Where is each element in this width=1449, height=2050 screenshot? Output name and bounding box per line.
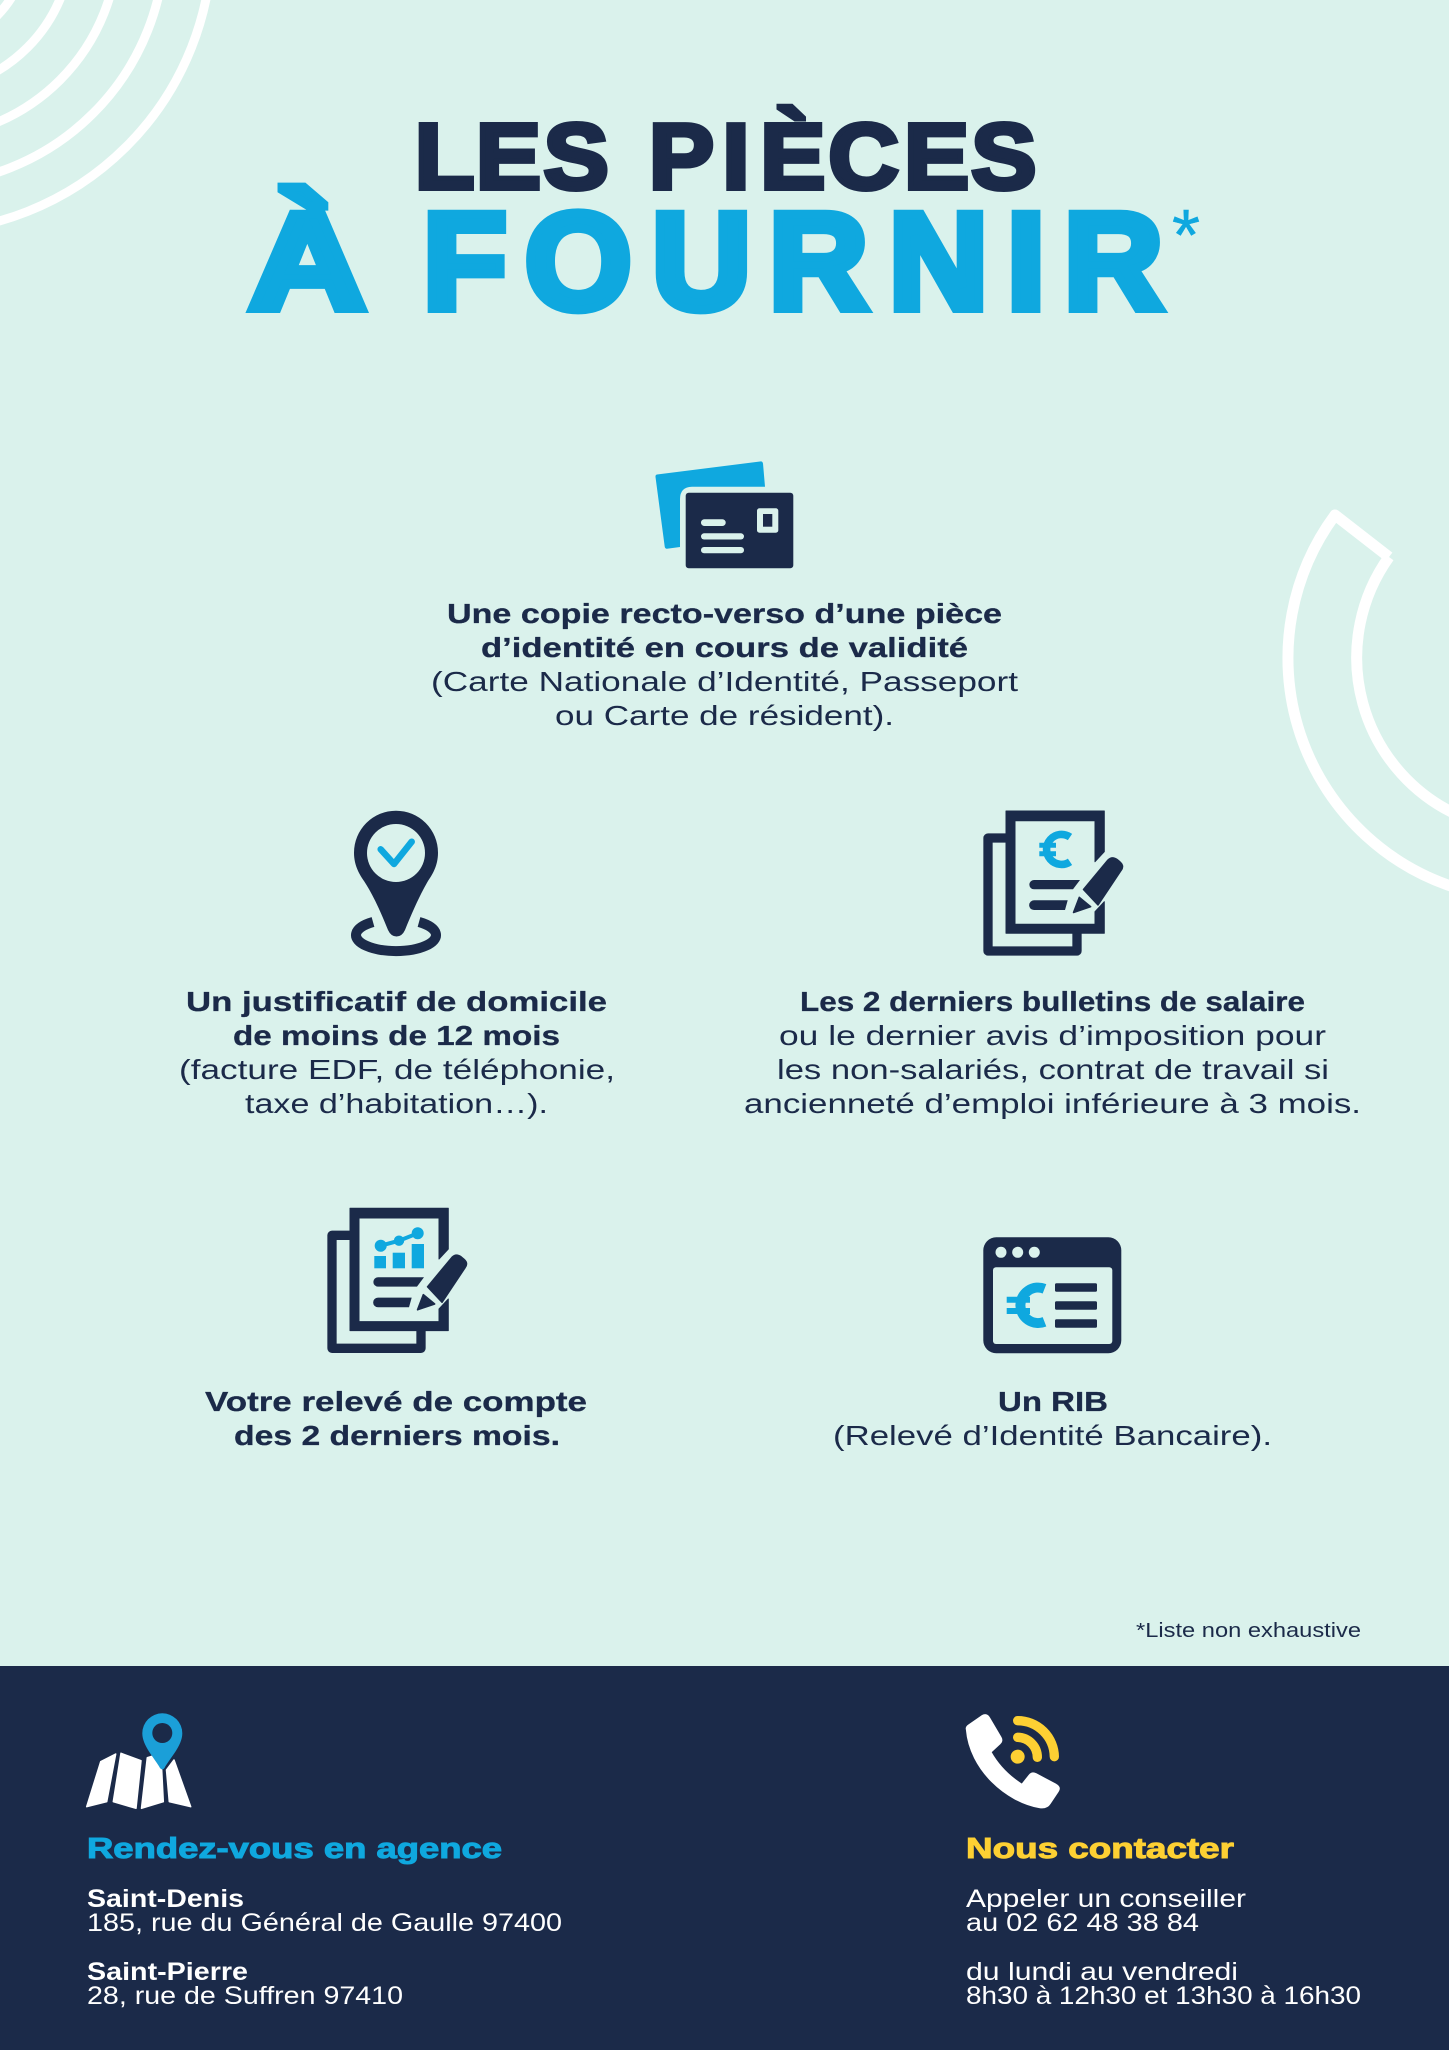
text: Saint-Denis address: 185, rue du Général de Gaulle 97400 — [87, 1909, 562, 1937]
text: justificatif de domicile: taxe d’habitation…). — [245, 1088, 548, 1119]
panel: footer — [0, 1666, 1449, 2050]
icon: identity cards — [655, 461, 793, 568]
decorative arcs: top left — [0, 0, 212, 232]
item: bulletins de salaire — [744, 811, 1361, 1119]
text: bulletins de salaire: ancienneté d’emploi inférieure à 3 mois. — [744, 1088, 1361, 1119]
icon: location pin with check — [354, 811, 438, 951]
icon: payslip documents — [988, 811, 1123, 951]
text: Saint-Pierre address: 28, rue de Suffren 97410 — [87, 1982, 403, 2010]
title line: LES PIÈCES: LES PIÈCES — [415, 106, 1036, 209]
icon: browser window with euro — [983, 1237, 1121, 1353]
heading: Nous contacter: Nous contacter — [966, 1833, 1234, 1865]
text: RIB: Un RIB — [998, 1386, 1108, 1417]
text: Saint-Denis address — [87, 1885, 562, 1937]
item: RIB — [833, 1237, 1272, 1451]
text: pièce d'identité: (Carte Nationale d’Identité, Passeport — [431, 666, 1018, 697]
item: justificatif de domicile — [179, 811, 615, 1119]
item: relevé de compte — [205, 1208, 587, 1451]
decorative arc: right — [1288, 515, 1449, 889]
text: bulletins de salaire: ou le dernier avis d’imposition pour — [779, 1020, 1326, 1051]
text: pièce d'identité: Une copie recto-verso d’une pièce — [447, 598, 1002, 629]
text: bulletins de salaire: Les 2 derniers bulletins de salaire — [800, 986, 1305, 1017]
text: opening hours: 8h30 à 12h30 et 13h30 à 16h30 — [966, 1982, 1361, 2010]
text: justificatif de domicile: (facture EDF, de téléphonie, — [179, 1054, 615, 1085]
text: pièce d'identité — [431, 598, 1018, 731]
title line: À: À — [249, 184, 366, 338]
heading: Rendez-vous en agence: Rendez-vous en agence — [87, 1833, 502, 1865]
text: phone number — [966, 1885, 1246, 1937]
icon: phone with signal — [967, 1715, 1059, 1808]
text: opening hours: du lundi au vendredi — [966, 1958, 1238, 1986]
text: RIB: (Relevé d’Identité Bancaire). — [833, 1420, 1272, 1451]
title asterisk: * — [1172, 196, 1200, 276]
text: relevé de compte: Votre relevé de compte — [205, 1386, 587, 1417]
icon: bank statement documents — [332, 1208, 467, 1348]
text: phone number: au 02 62 48 38 84 — [966, 1909, 1199, 1937]
text: pièce d'identité: ou Carte de résident). — [555, 700, 894, 731]
text: justificatif de domicile: Un justificatif de domicile — [186, 986, 607, 1017]
text: pièce d'identité: d’identité en cours de validité — [481, 632, 968, 663]
text: Saint-Denis address: Saint-Denis — [87, 1885, 244, 1913]
text: phone number: Appeler un conseiller — [966, 1885, 1246, 1913]
text: Saint-Pierre address: Saint-Pierre — [87, 1958, 248, 1986]
text: bulletins de salaire: les non-salariés, contrat de travail si — [777, 1054, 1329, 1085]
text: opening hours — [966, 1958, 1361, 2010]
text: relevé de compte — [205, 1386, 587, 1451]
text: relevé de compte: des 2 derniers mois. — [234, 1420, 560, 1451]
text: justificatif de domicile — [179, 986, 615, 1119]
text: RIB — [833, 1386, 1272, 1451]
title line: FOURNIR: FOURNIR — [423, 186, 1163, 338]
text: justificatif de domicile: de moins de 12 mois — [233, 1020, 560, 1051]
text: bulletins de salaire — [744, 986, 1361, 1119]
title — [249, 106, 1200, 338]
icon: map with pin — [87, 1713, 191, 1808]
item: pièce d'identité — [431, 461, 1018, 731]
text: Saint-Pierre address — [87, 1958, 403, 2010]
footnote: *Liste non exhaustive — [1136, 1620, 1361, 1642]
